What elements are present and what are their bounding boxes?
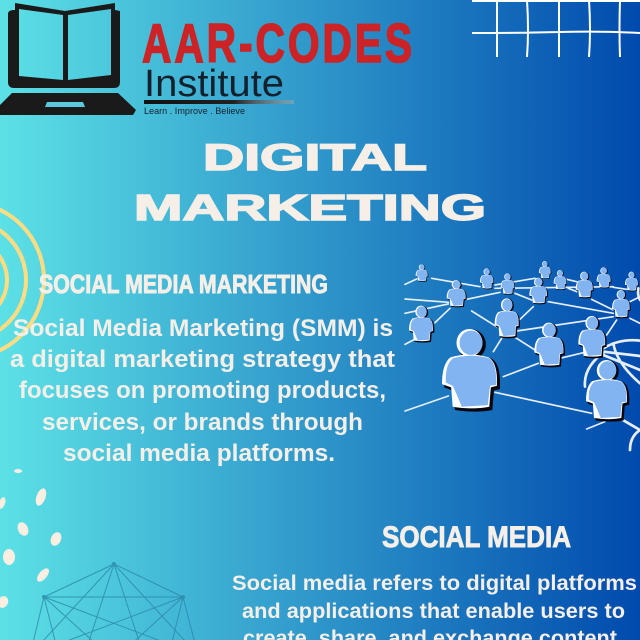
logo underline (144, 100, 294, 104)
text block: social media description: Social media refers to digital platforms (232, 572, 637, 595)
text block: SMM description: focuses on promoting products, (19, 377, 386, 404)
social network illustration (405, 261, 640, 450)
text block: SMM description (10, 315, 395, 467)
text block: SMM description: services, or brands through (42, 409, 363, 436)
logo name: AAR-CODES (142, 13, 412, 75)
concentric yellow arcs (0, 202, 44, 358)
text block: SMM description: a digital marketing strategy that (10, 346, 395, 373)
title: DIGITAL (203, 137, 427, 178)
title: MARKETING (134, 187, 486, 228)
heading: social media: SOCIAL MEDIA (382, 521, 571, 554)
logo subtitle: Institute (144, 63, 284, 105)
people (409, 261, 639, 422)
network links (405, 278, 640, 450)
logo: laptop with open book (0, 3, 136, 115)
heading: social media marketing: SOCIAL MEDIA MARKETING (39, 269, 328, 299)
text block: SMM description: social media platforms. (63, 440, 335, 467)
title (134, 137, 486, 228)
text block: SMM description: Social Media Marketing (SMM) is (13, 315, 393, 342)
text block: social media description: and applications that enable users to (242, 600, 625, 623)
logo wordmark (142, 13, 412, 117)
network polygon decoration (30, 562, 198, 640)
text block: social media description (232, 572, 637, 640)
pale brush dots (0, 469, 63, 610)
logo tagline: Learn . Improve . Believe (144, 106, 245, 117)
grid decoration top right (472, 0, 640, 57)
